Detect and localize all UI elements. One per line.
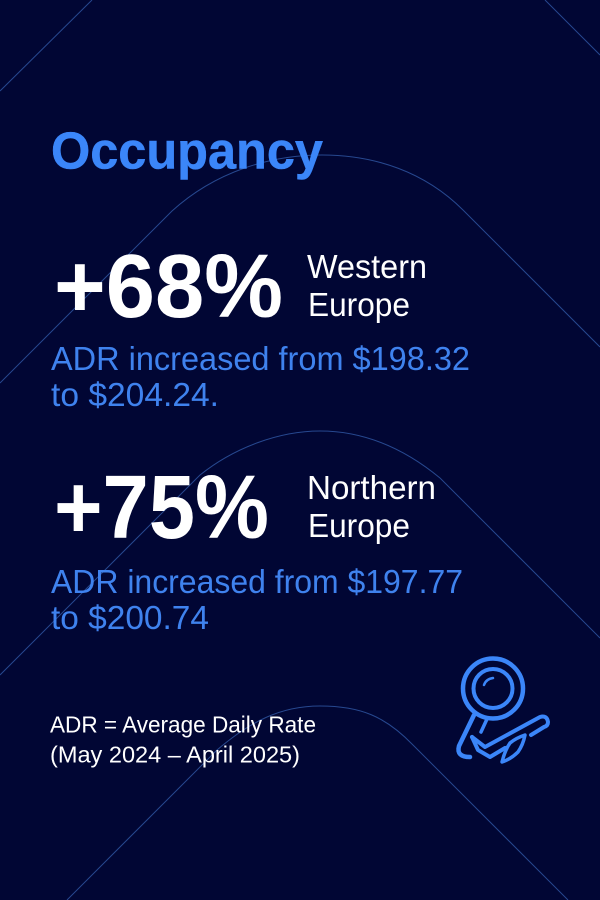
icon: magnifying glass and hand — [458, 658, 548, 762]
region label: Northern Europe: Northern — [307, 469, 436, 506]
description: ADR Northern Europe: ADR increased from $197.77 — [51, 563, 463, 600]
stat: Northern Europe — [51, 458, 463, 636]
title: Occupancy — [51, 122, 323, 180]
region label: Northern Europe: Europe — [308, 507, 410, 544]
description: ADR Western Europe: to $204.24. — [51, 376, 219, 413]
footnote: (May 2024 – April 2025) — [50, 742, 300, 768]
region label: Western Europe: Western — [307, 248, 427, 285]
value: +75%: +75% — [54, 458, 269, 558]
footnote: ADR = Average Daily Rate — [50, 712, 316, 738]
stat: Western Europe — [51, 237, 470, 413]
value: +68%: +68% — [54, 237, 283, 337]
description: ADR Western Europe: ADR increased from $198.32 — [51, 340, 470, 377]
description: ADR Northern Europe: to $200.74 — [51, 599, 209, 636]
region label: Western Europe: Europe — [308, 286, 410, 323]
